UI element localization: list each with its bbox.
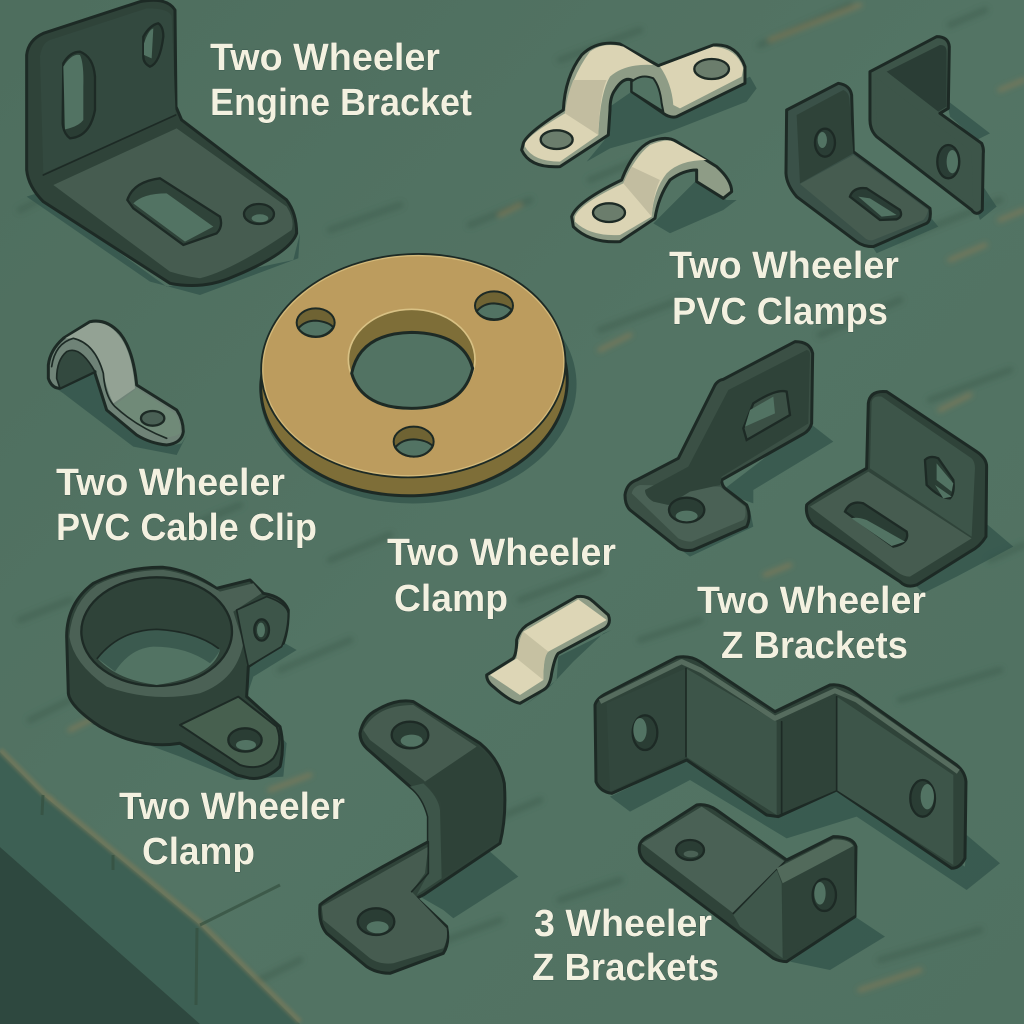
label: PVC clamps: PVC Clamps — [672, 291, 888, 333]
PVC cable clip — [48, 321, 187, 455]
table underside — [0, 847, 200, 1024]
hole: base small — [244, 204, 274, 224]
part: U strap bracket and cream clamp — [320, 596, 612, 973]
label: center clamp: Clamp — [394, 578, 508, 620]
3 wheeler Z bracket — [639, 805, 885, 970]
label: PVC clamps: Two Wheeler — [669, 245, 899, 287]
label: lower-left clamp: Clamp — [142, 831, 255, 873]
slot: base — [127, 178, 221, 245]
angled bracket — [625, 342, 833, 557]
label: PVC cable clip — [56, 462, 317, 549]
label: engine bracket: Engine Bracket — [210, 82, 472, 124]
small cream clamp — [487, 596, 612, 707]
label: Z brackets: Z Brackets — [721, 625, 908, 667]
table edge highlight — [0, 750, 300, 1022]
label: lower-left clamp: Two Wheeler — [119, 786, 345, 828]
label: Z brackets: Two Wheeler — [697, 580, 926, 622]
right L bracket — [806, 391, 1013, 593]
L-bracket: front — [786, 83, 938, 253]
label: PVC cable clip: Two Wheeler — [56, 462, 285, 504]
hole: upright small — [143, 23, 163, 67]
label: 3 wheeler Z brackets: Z Brackets — [532, 947, 719, 989]
washer: center hole — [348, 309, 475, 409]
round clamp — [67, 567, 297, 780]
label: center clamp: Two Wheeler — [387, 532, 616, 574]
clamp: upper — [522, 43, 757, 167]
label: Z brackets — [697, 580, 926, 667]
table front face — [0, 750, 300, 1024]
table side — [0, 752, 300, 1024]
part: angled bracket and right L bracket — [625, 342, 1013, 593]
label: lower-left clamp — [119, 786, 345, 873]
label: PVC cable clip: PVC Cable Clip — [56, 507, 317, 549]
label: engine bracket: Two Wheeler — [210, 37, 440, 79]
washer: bolt holes — [297, 308, 335, 337]
part: PVC cable clip and round clamp — [48, 321, 297, 780]
part: gold washer — [254, 247, 582, 511]
part: large Z bracket and 3 wheeler bracket — [595, 657, 1000, 970]
U strap bracket — [320, 701, 518, 973]
large Z bracket — [595, 657, 1000, 890]
label: PVC clamps — [669, 245, 899, 333]
part: PVC clamps and right L-brackets — [522, 37, 997, 253]
label: center clamp — [387, 532, 616, 620]
part: engine bracket — [27, 0, 300, 295]
clamp: lower — [572, 138, 737, 242]
L-bracket: rear — [870, 37, 997, 220]
slot: upright — [63, 52, 95, 138]
label: 3 wheeler Z brackets: 3 Wheeler — [534, 903, 712, 945]
label: engine bracket — [210, 37, 472, 124]
label: 3 wheeler Z brackets — [532, 903, 719, 989]
